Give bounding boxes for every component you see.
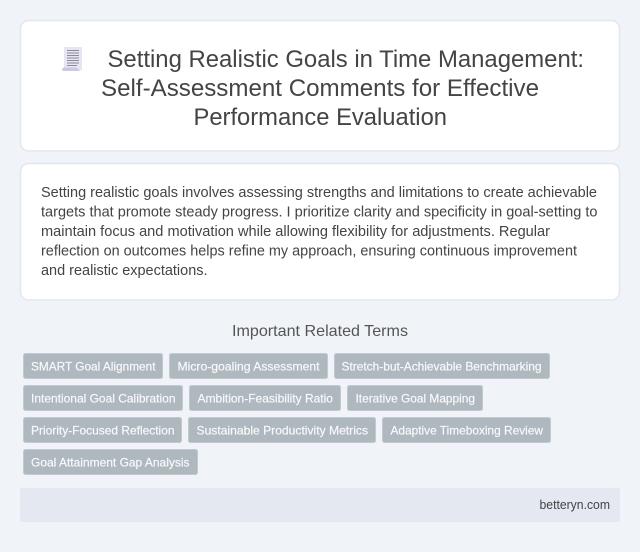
tag: Priority-Focused Reflection <box>24 418 182 442</box>
tag: SMART Goal Alignment <box>24 354 162 378</box>
footer text: betteryn.com: betteryn.com <box>540 498 610 512</box>
text block: description: targets that promote steady progress. I prioritize clarity and specificity in goal-setting to <box>41 204 598 220</box>
tag: Priority-Focused Reflection: Priority-Focused Reflection <box>31 424 174 438</box>
tag: Ambition-Feasibility Ratio: Ambition-Feasibility Ratio <box>198 392 333 406</box>
tag: SMART Goal Alignment: SMART Goal Alignment <box>31 360 156 374</box>
panel: description card <box>20 164 620 300</box>
text block: description: and realistic expectations. <box>41 263 208 279</box>
footer bar <box>20 488 620 522</box>
tag: Intentional Goal Calibration <box>24 386 182 410</box>
tag: Intentional Goal Calibration: Intentional Goal Calibration <box>31 392 176 406</box>
heading: important related terms: Important Related Terms <box>232 323 408 340</box>
title <box>101 46 584 131</box>
tag: Goal Attainment Gap Analysis <box>24 450 198 474</box>
tag: Iterative Goal Mapping <box>348 386 482 410</box>
title: Self-Assessment Comments for Effective <box>101 75 539 102</box>
tag: Micro-goaling Assessment: Micro-goaling Assessment <box>178 360 320 374</box>
title: Setting Realistic Goals in Time Management: <box>108 46 584 73</box>
tag: Sustainable Productivity Metrics <box>188 418 376 442</box>
panel: related term tags <box>24 354 550 474</box>
text block: description: reflection on outcomes helps refine my approach, ensuring continuous improvement <box>41 244 577 260</box>
tag: Goal Attainment Gap Analysis: Goal Attainment Gap Analysis <box>31 456 190 470</box>
tag: Ambition-Feasibility Ratio <box>190 386 340 410</box>
icon: document scroll <box>62 47 82 71</box>
tag: Adaptive Timeboxing Review <box>382 418 550 442</box>
tag: Micro-goaling Assessment <box>170 354 328 378</box>
text block: description: maintain focus and motivation while allowing flexibility for adjustments. Regular <box>41 224 550 240</box>
tag: Adaptive Timeboxing Review: Adaptive Timeboxing Review <box>390 424 543 438</box>
text block: description: Setting realistic goals involves assessing strengths and limitations to create achievable <box>41 185 597 201</box>
title: Performance Evaluation <box>194 104 447 131</box>
panel: title card <box>20 20 620 151</box>
tag: Iterative Goal Mapping: Iterative Goal Mapping <box>356 392 475 406</box>
tag: Stretch-but-Achievable Benchmarking <box>334 354 550 378</box>
tag: Stretch-but-Achievable Benchmarking: Stretch-but-Achievable Benchmarking <box>342 360 542 374</box>
text block: description <box>41 185 598 279</box>
tag: Sustainable Productivity Metrics: Sustainable Productivity Metrics <box>196 424 368 438</box>
